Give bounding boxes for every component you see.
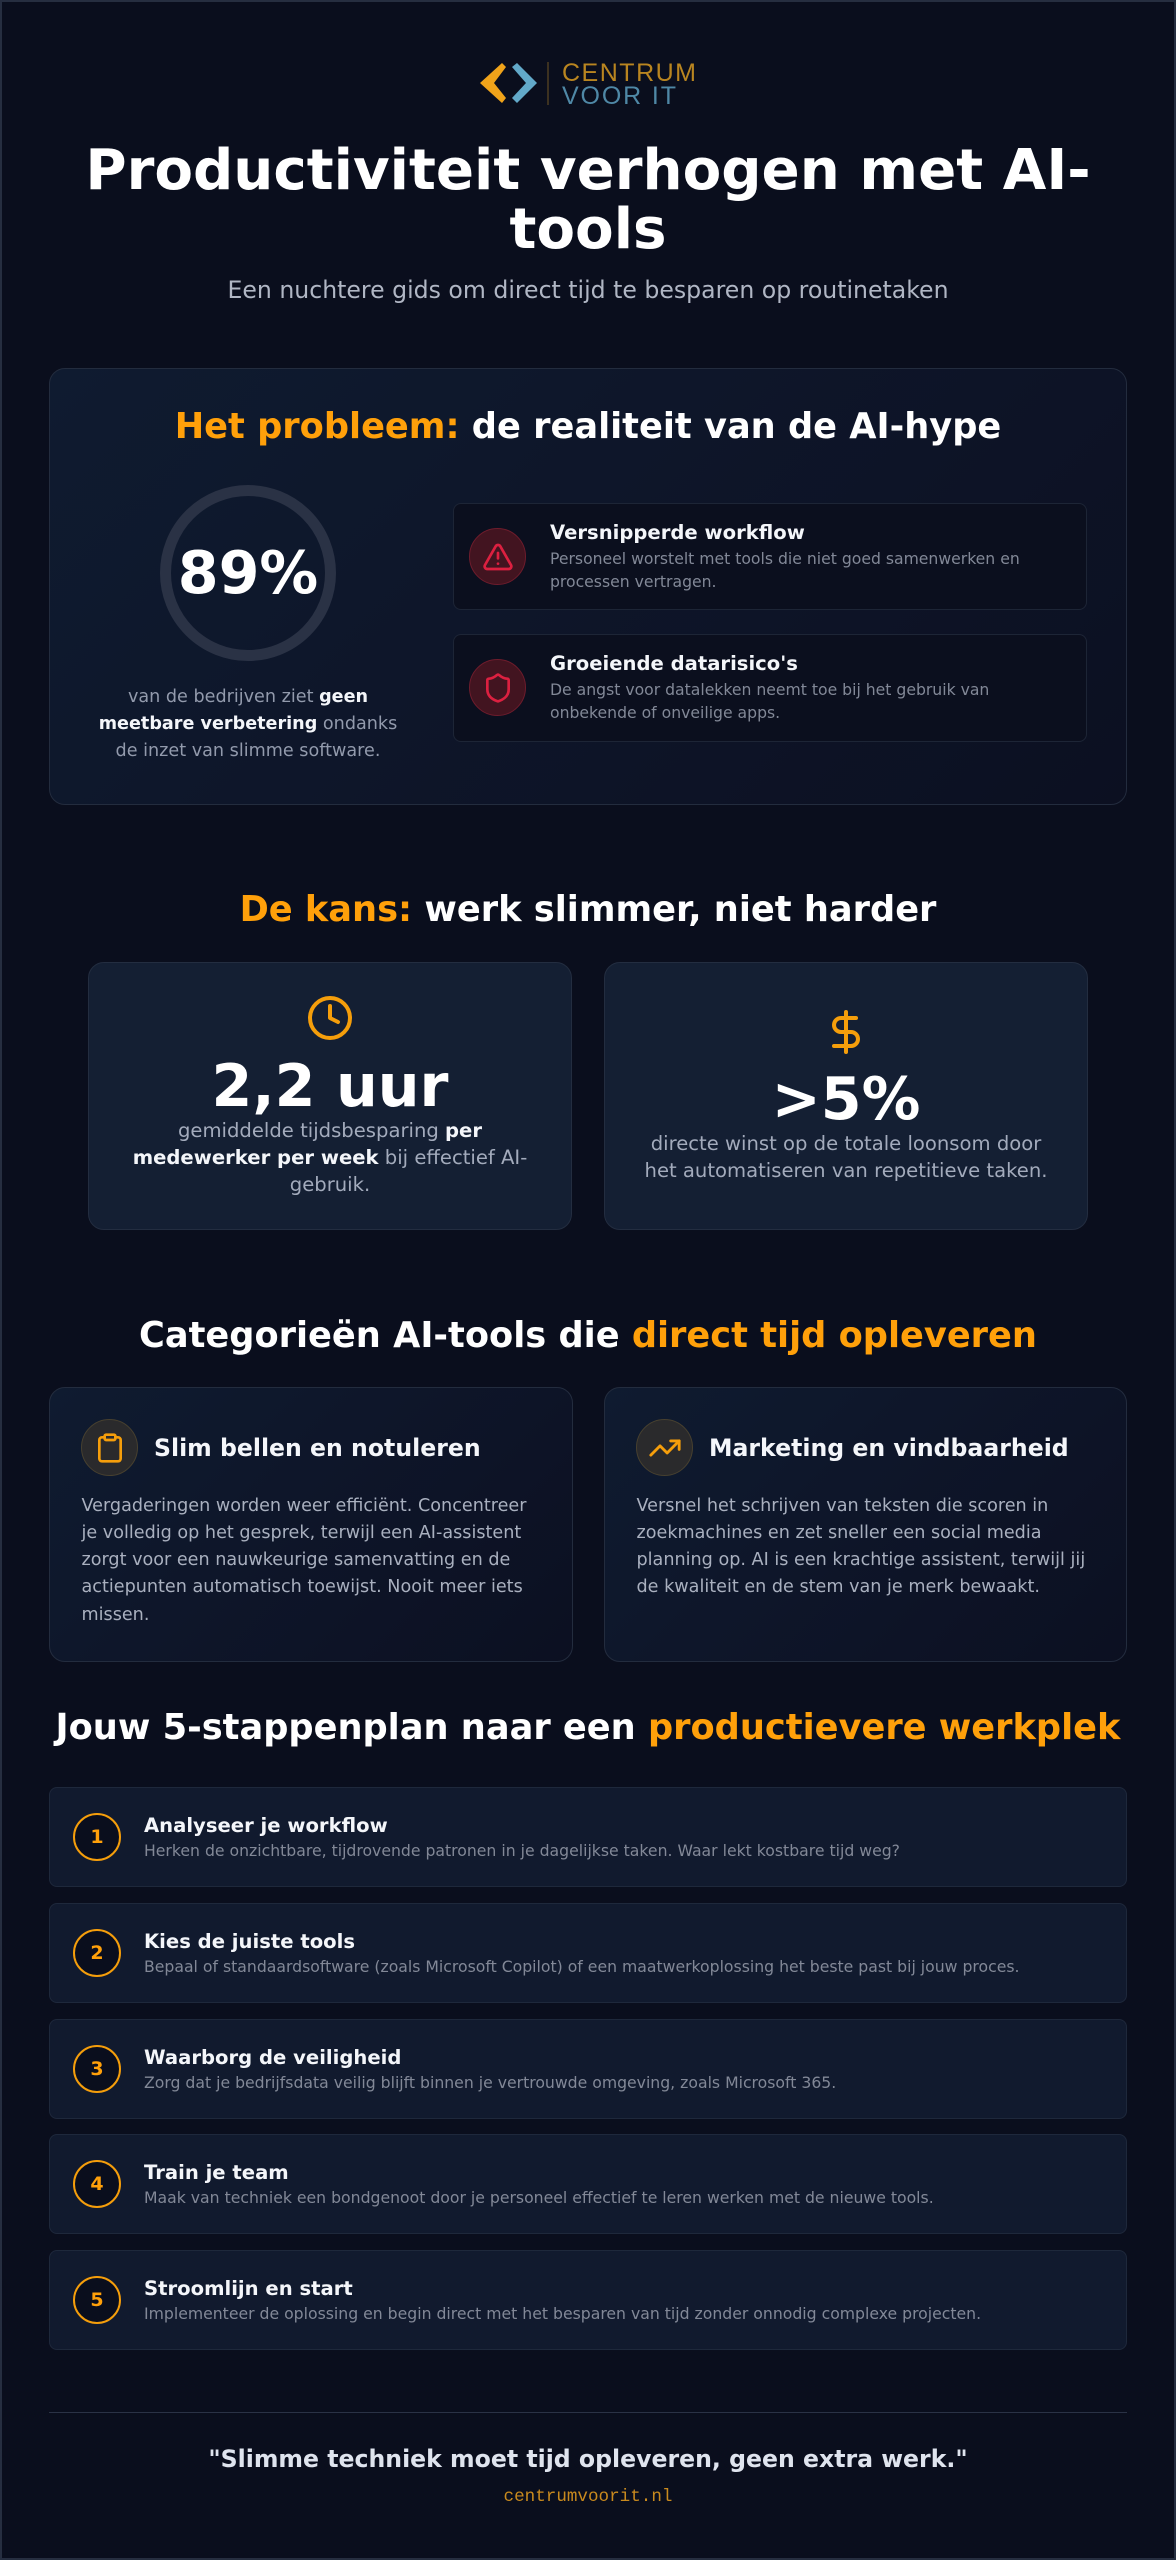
stat text bbox=[645, 1132, 1047, 1182]
stat card: >5% bbox=[604, 962, 1088, 1230]
card text bbox=[81, 1496, 526, 1625]
footer website: centrumvoorit.nl bbox=[504, 2487, 672, 2507]
card text: processen vertragen. bbox=[550, 572, 717, 591]
stat caption: van de bedrijven ziet geen bbox=[128, 686, 368, 706]
stat value: >5% bbox=[772, 1065, 920, 1133]
stat caption: de inzet van slimme software. bbox=[116, 741, 380, 761]
card: versnipperde workflow bbox=[453, 503, 1087, 610]
card text: onbekende of onveilige apps. bbox=[550, 703, 780, 722]
number 1: 1 bbox=[90, 1826, 104, 1848]
step 5 bbox=[49, 2250, 1127, 2350]
stat text: gemiddelde tijdsbesparing per bbox=[178, 1119, 482, 1142]
card text: zoekmachines en zet sneller een social media bbox=[636, 1523, 1042, 1543]
step text: Implementeer de oplossing en begin direct met het besparen van tijd zonder onnodig complexe projecten. bbox=[144, 2304, 981, 2323]
step title: Kies de juiste tools bbox=[144, 1930, 355, 1953]
heading: categorieen: Categorieën AI-tools die direct tijd opleveren bbox=[139, 1315, 1037, 1356]
stat value 89%: 89% bbox=[178, 539, 318, 607]
stat text: het automatiseren van repetitieve taken. bbox=[645, 1159, 1047, 1182]
heading: stappenplan: Jouw 5-stappenplan naar een productievere werkplek bbox=[56, 1706, 1120, 1748]
panel: slim bellen bbox=[49, 1387, 573, 1662]
step text: Bepaal of standaardsoftware (zoals Microsoft Copilot) of een maatwerkoplossing het beste past bij jouw proces. bbox=[144, 1957, 1020, 1976]
icon: warning bbox=[469, 528, 526, 585]
number 3 bbox=[73, 2045, 121, 2093]
title bbox=[85, 138, 1091, 262]
stat text: directe winst op de totale loonsom door bbox=[651, 1132, 1041, 1155]
logo: Centrum voor IT bbox=[480, 59, 696, 108]
card text: de kwaliteit en de stem van je merk bewaakt. bbox=[636, 1577, 1040, 1597]
heading: de kans: De kans: werk slimmer, niet harder bbox=[240, 889, 936, 930]
card: groeiende datarisico's bbox=[453, 634, 1087, 742]
card title: Versnipperde workflow bbox=[550, 521, 805, 544]
number 3: 3 bbox=[90, 2058, 104, 2080]
number 5: 5 bbox=[90, 2289, 104, 2311]
card title: Marketing en vindbaarheid bbox=[709, 1434, 1069, 1462]
title: tools bbox=[509, 197, 667, 262]
step text: Zorg dat je bedrijfsdata veilig blijft binnen je vertrouwde omgeving, zoals Microsoft 365. bbox=[144, 2073, 836, 2092]
card text: zorgt voor een nauwkeurige samenvatting en de bbox=[82, 1550, 510, 1570]
card title: Groeiende datarisico's bbox=[550, 652, 798, 675]
step text: Maak van techniek een bondgenoot door je personeel effectief te leren werken met de nieuwe tools. bbox=[144, 2188, 934, 2207]
stat card: 2,2 uur bbox=[88, 962, 572, 1230]
card title: Slim bellen en notuleren bbox=[154, 1434, 481, 1462]
number 4: 4 bbox=[90, 2173, 104, 2195]
card text: planning op. AI is een krachtige assistent, terwijl jij bbox=[636, 1550, 1085, 1570]
subtitle: Een nuchtere gids om direct tijd te besparen op routinetaken bbox=[227, 276, 949, 304]
heading: het probleem: Het probleem: de realiteit van de AI-hype bbox=[175, 406, 1001, 447]
card text: Vergaderingen worden weer efficiënt. Concentreer bbox=[82, 1496, 526, 1516]
stat text: gebruik. bbox=[290, 1173, 370, 1196]
step 1 bbox=[49, 1787, 1127, 1887]
footer quote: "Slimme techniek moet tijd opleveren, geen extra werk." bbox=[208, 2445, 968, 2473]
panel: marketing bbox=[604, 1387, 1127, 1662]
stat caption: meetbare verbetering ondanks bbox=[99, 714, 397, 734]
step 4 bbox=[49, 2134, 1127, 2234]
step title: Stroomlijn en start bbox=[144, 2277, 353, 2300]
stat value: 2,2 uur bbox=[212, 1052, 448, 1120]
icon: clipboard bbox=[81, 1419, 138, 1476]
icon: clock bbox=[308, 996, 352, 1040]
stat text bbox=[133, 1119, 527, 1196]
icon: shield bbox=[469, 659, 526, 716]
number 2: 2 bbox=[90, 1942, 104, 1964]
icon: trending up bbox=[636, 1419, 693, 1476]
step title: Train je team bbox=[144, 2161, 289, 2184]
card text bbox=[550, 549, 1020, 591]
icon: dollar bbox=[832, 1010, 860, 1054]
card text bbox=[636, 1496, 1085, 1597]
number 5 bbox=[73, 2276, 121, 2324]
number 2 bbox=[73, 1929, 121, 1977]
step 2 bbox=[49, 1903, 1127, 2003]
panel: probleem bbox=[49, 368, 1127, 805]
number 4 bbox=[73, 2160, 121, 2208]
number 1 bbox=[73, 1813, 121, 1861]
card text: Versnel het schrijven van teksten die scoren in bbox=[636, 1496, 1048, 1516]
card text: Personeel worstelt met tools die niet goed samenwerken en bbox=[550, 549, 1020, 568]
logo: Centrum voor IT: CENTRUM bbox=[562, 59, 696, 87]
stat ring 89% bbox=[160, 485, 336, 661]
step title: Analyseer je workflow bbox=[144, 1814, 388, 1837]
card text: je volledig op het gesprek, terwijl een AI-assistent bbox=[82, 1523, 521, 1543]
card text: actiepunten automatisch toewijst. Nooit meer iets bbox=[82, 1577, 523, 1597]
stat text: medewerker per week bij effectief AI- bbox=[133, 1146, 527, 1169]
step title: Waarborg de veiligheid bbox=[144, 2046, 401, 2069]
stat caption bbox=[99, 686, 397, 761]
card text: De angst voor datalekken neemt toe bij het gebruik van bbox=[550, 680, 989, 699]
title: Productiviteit verhogen met AI- bbox=[85, 138, 1091, 203]
card text: missen. bbox=[82, 1605, 149, 1625]
card text bbox=[550, 680, 989, 722]
step text: Herken de onzichtbare, tijdrovende patronen in je dagelijkse taken. Waar lekt kostbare tijd weg? bbox=[144, 1841, 900, 1860]
step 3 bbox=[49, 2019, 1127, 2119]
